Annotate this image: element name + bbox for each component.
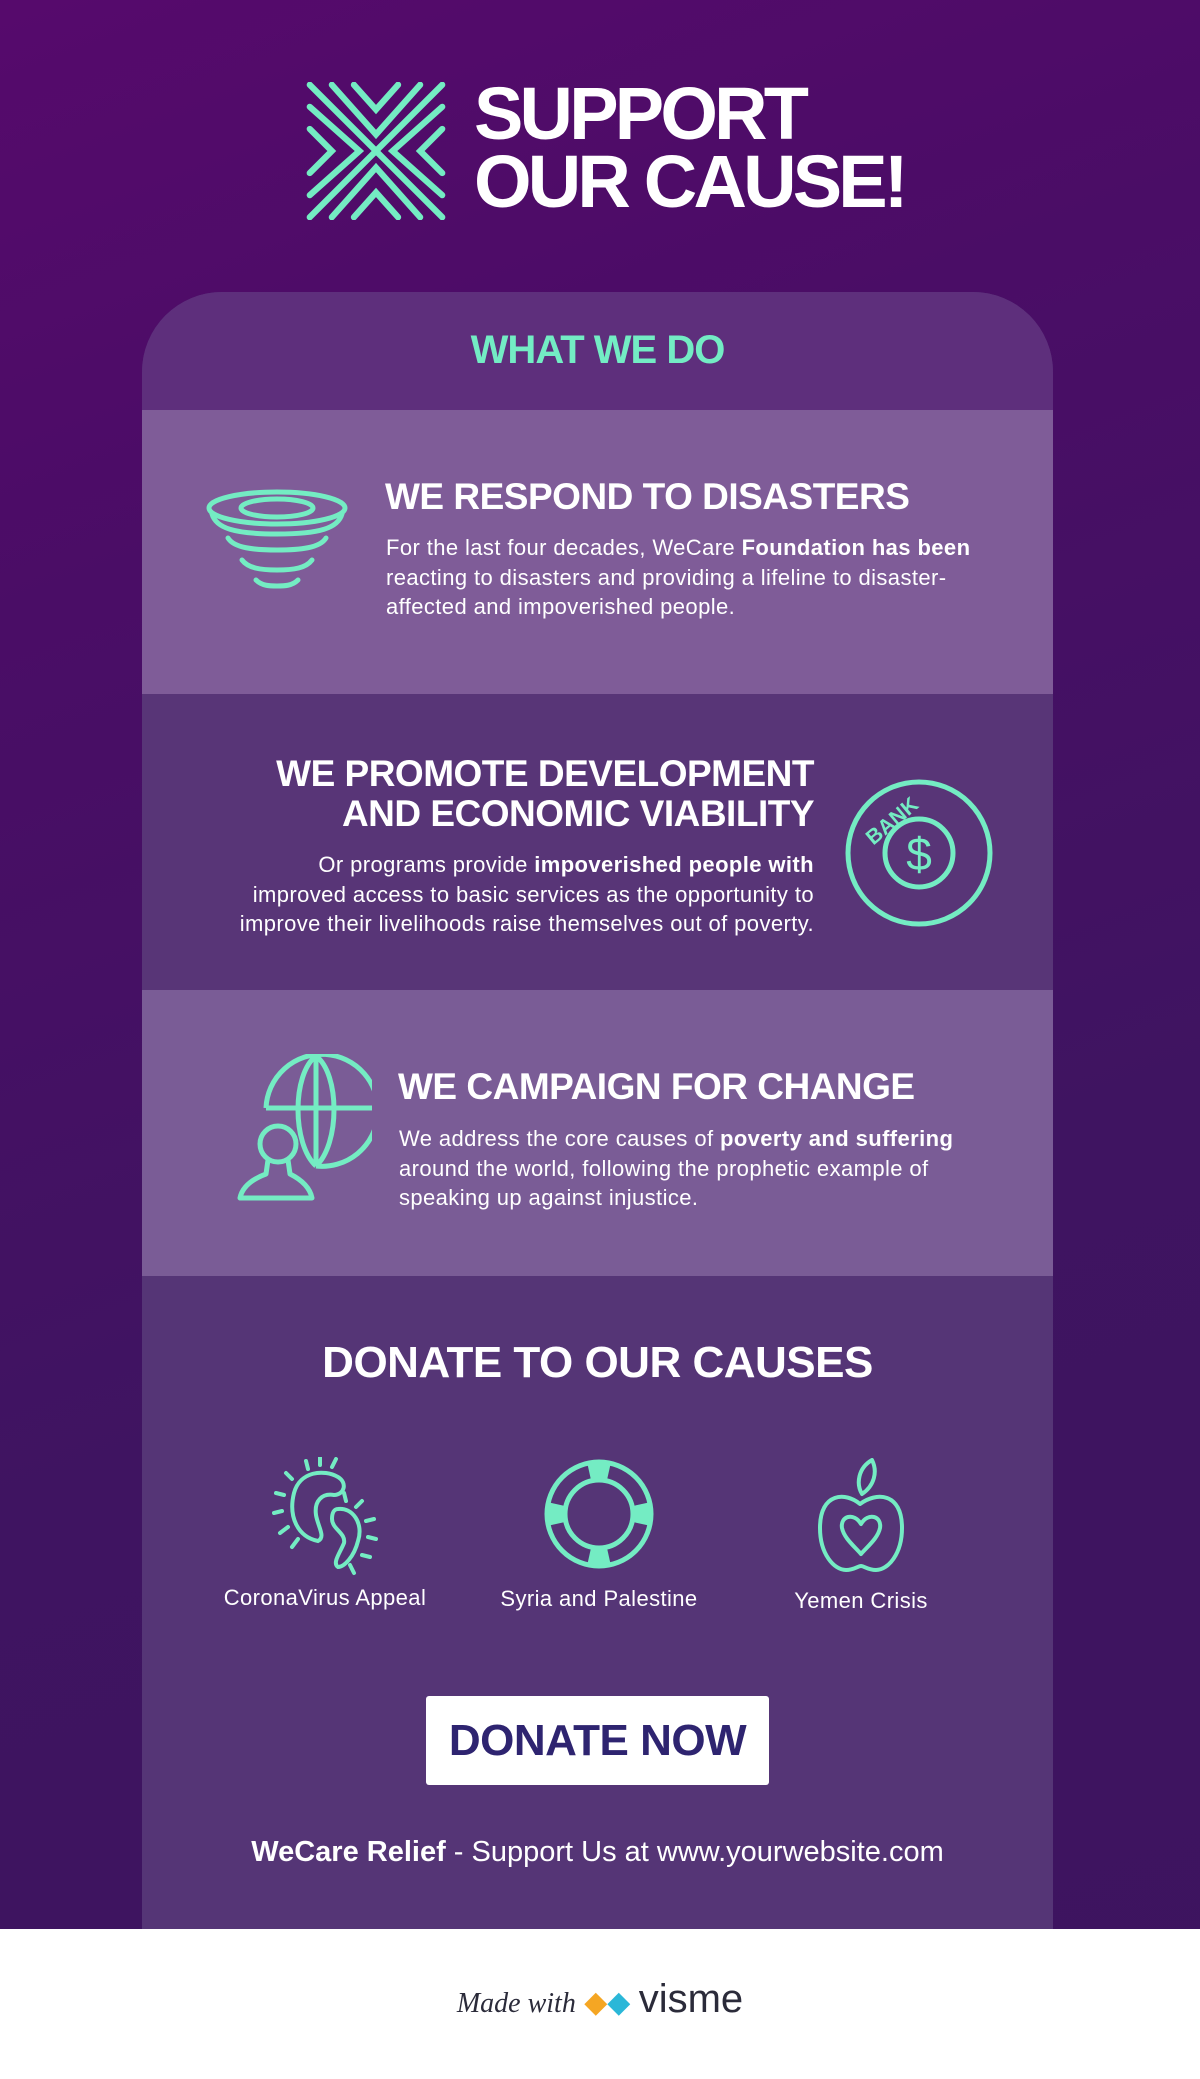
icon: globe person — [238, 1054, 372, 1200]
title — [474, 72, 905, 223]
section text: improved access to basic services as the opportunity to — [253, 882, 814, 906]
section text: We address the core causes of poverty and suffering — [399, 1126, 953, 1151]
section text: speaking up against injustice. — [399, 1185, 698, 1210]
label: Yemen Crisis — [794, 1588, 928, 1613]
section: development — [142, 694, 1053, 990]
section text — [386, 535, 970, 619]
title: OUR CAUSE! — [474, 140, 905, 223]
cause: syria — [500, 1460, 698, 1611]
section title: WE CAMPAIGN FOR CHANGE — [398, 1066, 915, 1107]
button: donate now: DONATE NOW — [449, 1716, 746, 1765]
icon: virus — [272, 1457, 378, 1576]
section title: WE RESPOND TO DISASTERS — [385, 476, 909, 517]
section text: affected and impoverished people. — [386, 594, 735, 619]
label: CoronaVirus Appeal — [224, 1585, 426, 1610]
section text: reacting to disasters and providing a lifeline to disaster- — [386, 564, 946, 590]
logo icon — [306, 82, 446, 220]
panel header — [142, 292, 1053, 410]
icon: tornado — [206, 490, 348, 588]
icon: apple heart — [818, 1458, 904, 1572]
label: Syria and Palestine — [500, 1586, 698, 1611]
icon: lifebuoy — [544, 1460, 654, 1568]
made with visme: Made with ◆◆ visme — [457, 1977, 743, 2021]
bottom white bar — [0, 1929, 1200, 2079]
section text: For the last four decades, WeCare Foundation has been — [386, 535, 970, 560]
main panel — [142, 292, 1053, 1929]
heading: donate: DONATE TO OUR CAUSES — [322, 1338, 873, 1387]
cause: coronavirus — [224, 1457, 426, 1610]
section: campaign — [142, 990, 1053, 1276]
section title: AND ECONOMIC VIABILITY — [342, 793, 814, 834]
button: donate now — [426, 1696, 769, 1785]
icon: bank coin: $ — [906, 828, 932, 880]
icon: bank coin: BANK — [862, 793, 923, 850]
section title: WE PROMOTE DEVELOPMENT — [276, 753, 814, 794]
title: SUPPORT — [474, 72, 805, 155]
section text — [399, 1126, 953, 1210]
section: disasters — [142, 410, 1053, 694]
section text — [240, 852, 814, 936]
footer text: WeCare Relief - Support Us at www.yourwebsite.com — [251, 1836, 944, 1868]
section text: Or programs provide impoverished people with — [318, 852, 814, 877]
heading: what we do: WHAT WE DO — [471, 328, 724, 372]
section text: around the world, following the prophetic example of — [399, 1156, 929, 1180]
section text: improve their livelihoods raise themselves out of poverty. — [240, 911, 814, 936]
section title — [276, 753, 814, 834]
icon: bank coin — [846, 780, 992, 926]
cause: yemen — [794, 1458, 928, 1613]
